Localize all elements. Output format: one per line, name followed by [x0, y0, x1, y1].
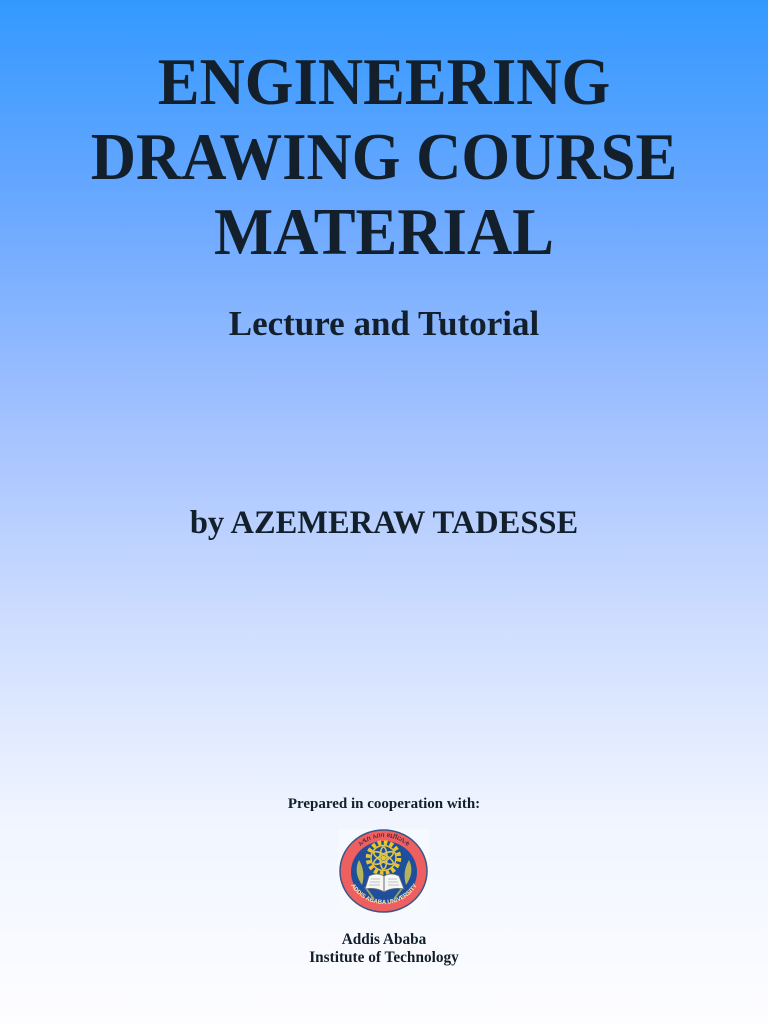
title — [91, 45, 677, 269]
title: DRAWING COURSE — [91, 120, 677, 194]
institution name: Institute of Technology — [309, 949, 459, 966]
title: ENGINEERING — [158, 45, 610, 119]
subtitle: Lecture and Tutorial — [229, 304, 539, 343]
institution name: Addis Ababa — [342, 931, 426, 948]
icon: Addis Ababa University seal: አዲስ አበባ ዩኒቨርሲቲ — [358, 833, 410, 846]
cooperation note: Prepared in cooperation with: — [288, 796, 480, 812]
icon: Addis Ababa University seal: ADDIS ABABA UNIVERSITY — [351, 883, 416, 904]
author: by AZEMERAW TADESSE — [190, 505, 578, 541]
icon: Addis Ababa University seal — [339, 829, 428, 913]
title: MATERIAL — [214, 195, 554, 269]
institution name — [309, 931, 459, 966]
